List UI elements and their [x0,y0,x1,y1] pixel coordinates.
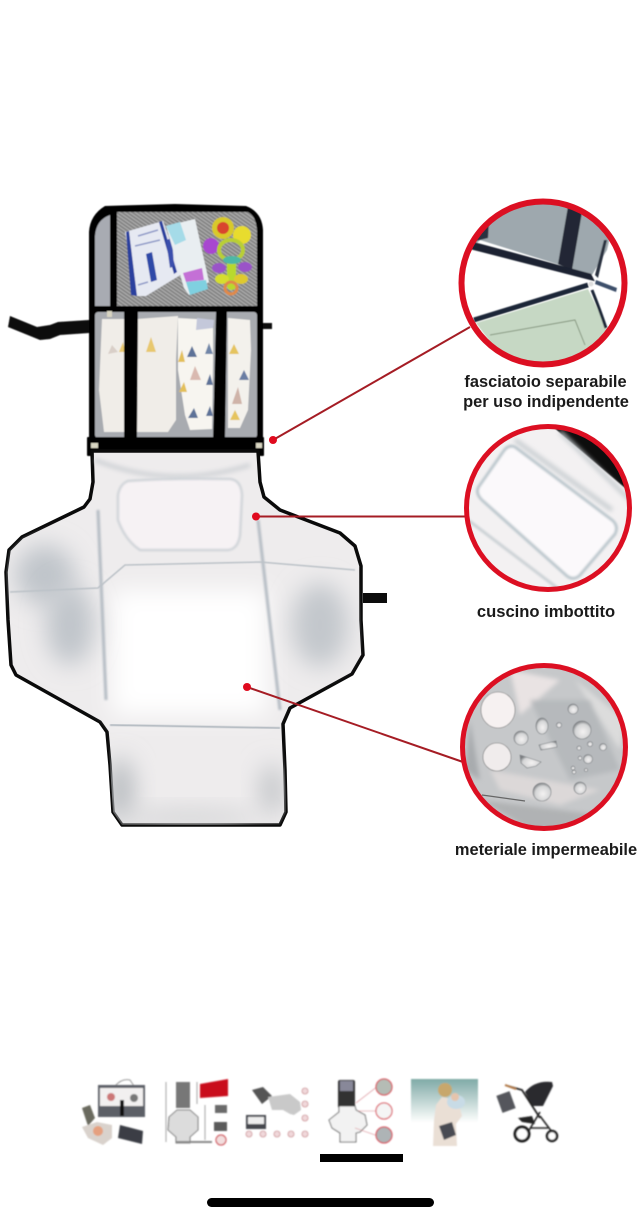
callout line: waterproof [243,683,463,762]
zipper bar [87,437,264,456]
red ring [462,202,624,364]
thumbnail 5: mother photo [411,1079,478,1146]
organizer frame [89,204,263,455]
strap [558,208,582,270]
callout line: pillow [252,512,466,520]
thumbnail 2: dimensions [166,1079,228,1145]
circle detail: padded pillow [466,426,640,590]
leader dot [252,512,260,520]
binding lower [474,285,588,320]
baby toy [203,217,252,294]
circle detail: waterproof material [462,665,626,835]
binding upper [468,243,592,279]
thumbnail 1: folded bag [82,1080,145,1145]
label: separable: fasciatoio separabile [464,373,627,391]
label: waterproof material: meteriale impermeabile [455,841,637,859]
diapers [99,316,251,432]
cream tube [166,219,209,295]
home indicator bar [207,1198,434,1207]
circle detail: zipper separation [460,195,625,370]
leader line [256,516,466,518]
gray panel [476,204,610,275]
tab: right strap [262,323,272,329]
diaper pocket [95,312,257,438]
thumbnail 6: stroller [496,1082,557,1141]
thumbnail strip [82,1079,557,1146]
leader dot [243,683,251,691]
water droplets [481,692,606,801]
label: padded pillow: cuscino imbottito [477,602,615,621]
pillow [477,446,616,578]
zipper pull [595,280,617,292]
side gray strip [95,215,110,306]
red ring [462,666,626,828]
dark corner [476,226,490,242]
changing mat [6,451,387,826]
right side tab [363,593,387,603]
organizer panel: top storage section [8,204,272,456]
red ring [466,426,630,590]
zipper pulls [91,311,262,448]
strap: left buckle [8,316,89,340]
callout line: separable [269,327,470,444]
green fabric [476,288,607,362]
leader line [273,327,470,440]
fabric folds [465,670,625,835]
thumbnail 4: current infographic [329,1079,392,1143]
leader dot [269,436,277,444]
wipes packets [125,221,182,296]
diaper pocket straps [124,312,227,440]
mesh pocket [117,212,257,306]
black corner [554,429,624,488]
label: independent use: per uso indipendente [463,393,629,411]
mesh divider bar [89,306,263,312]
mat shading [10,460,355,826]
leader line [247,687,463,762]
head pillow [118,479,242,550]
silver fold [515,432,630,510]
active thumbnail indicator [320,1154,403,1162]
thumbnail 3: open mat and icons [246,1087,308,1137]
mat outline [6,451,363,825]
